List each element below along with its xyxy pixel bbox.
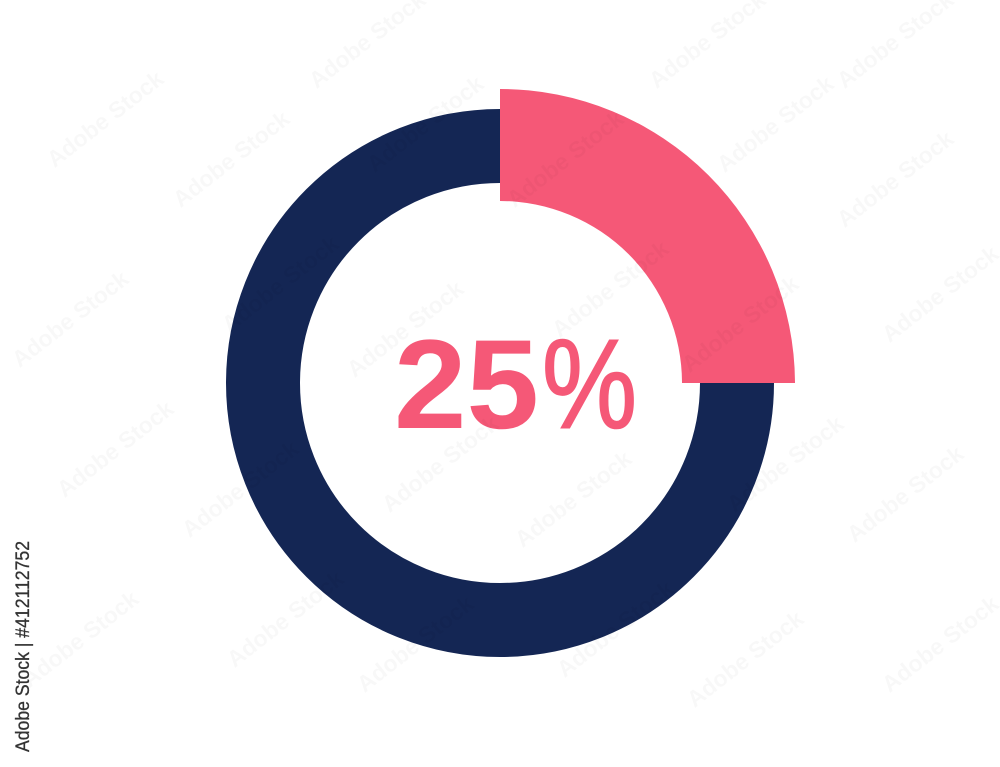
faint diagonal watermark pattern: Adobe Stock <box>377 410 504 517</box>
pink segment: 25% <box>500 89 795 383</box>
faint diagonal watermark pattern: Adobe Stock <box>502 105 629 212</box>
faint diagonal watermark pattern: Adobe Stock <box>222 565 349 672</box>
faint diagonal watermark pattern: Adobe Stock <box>877 590 1000 697</box>
faint diagonal watermark pattern: Adobe Stock <box>722 410 849 517</box>
faint diagonal watermark pattern: Adobe Stock <box>712 70 839 177</box>
faint diagonal watermark pattern: Adobe Stock <box>217 230 344 337</box>
faint diagonal watermark pattern: Adobe Stock <box>510 445 637 552</box>
vertical stock image credit: Adobe Stock | #412112752 <box>13 541 34 752</box>
faint diagonal watermark pattern: Adobe Stock <box>677 270 804 377</box>
faint diagonal watermark pattern: Adobe Stock <box>362 70 489 177</box>
faint diagonal watermark pattern: Adobe Stock <box>342 275 469 382</box>
faint diagonal watermark pattern: Adobe Stock <box>547 235 674 342</box>
percentage label <box>394 313 637 455</box>
faint diagonal watermark pattern: Adobe Stock <box>177 435 304 542</box>
faint diagonal watermark pattern: Adobe Stock <box>168 105 295 212</box>
faint diagonal watermark pattern: Adobe Stock <box>682 605 809 712</box>
faint diagonal watermark pattern: Adobe Stock <box>17 585 144 692</box>
faint diagonal watermark pattern: Adobe Stock <box>832 125 959 232</box>
faint diagonal watermark pattern: Adobe Stock <box>42 65 169 172</box>
faint diagonal watermark pattern: Adobe Stock <box>52 395 179 502</box>
percentage label: % <box>542 313 637 455</box>
faint diagonal watermark pattern: Adobe Stock <box>352 590 479 697</box>
faint diagonal watermark pattern: Adobe Stock <box>7 265 134 372</box>
faint diagonal watermark pattern: Adobe Stock <box>842 440 969 547</box>
percentage label: 25 <box>394 313 539 455</box>
faint diagonal watermark pattern: Adobe Stock <box>552 575 679 682</box>
donut ring: remaining 75% <box>263 146 737 620</box>
faint diagonal watermark pattern: Adobe Stock <box>877 240 1000 347</box>
